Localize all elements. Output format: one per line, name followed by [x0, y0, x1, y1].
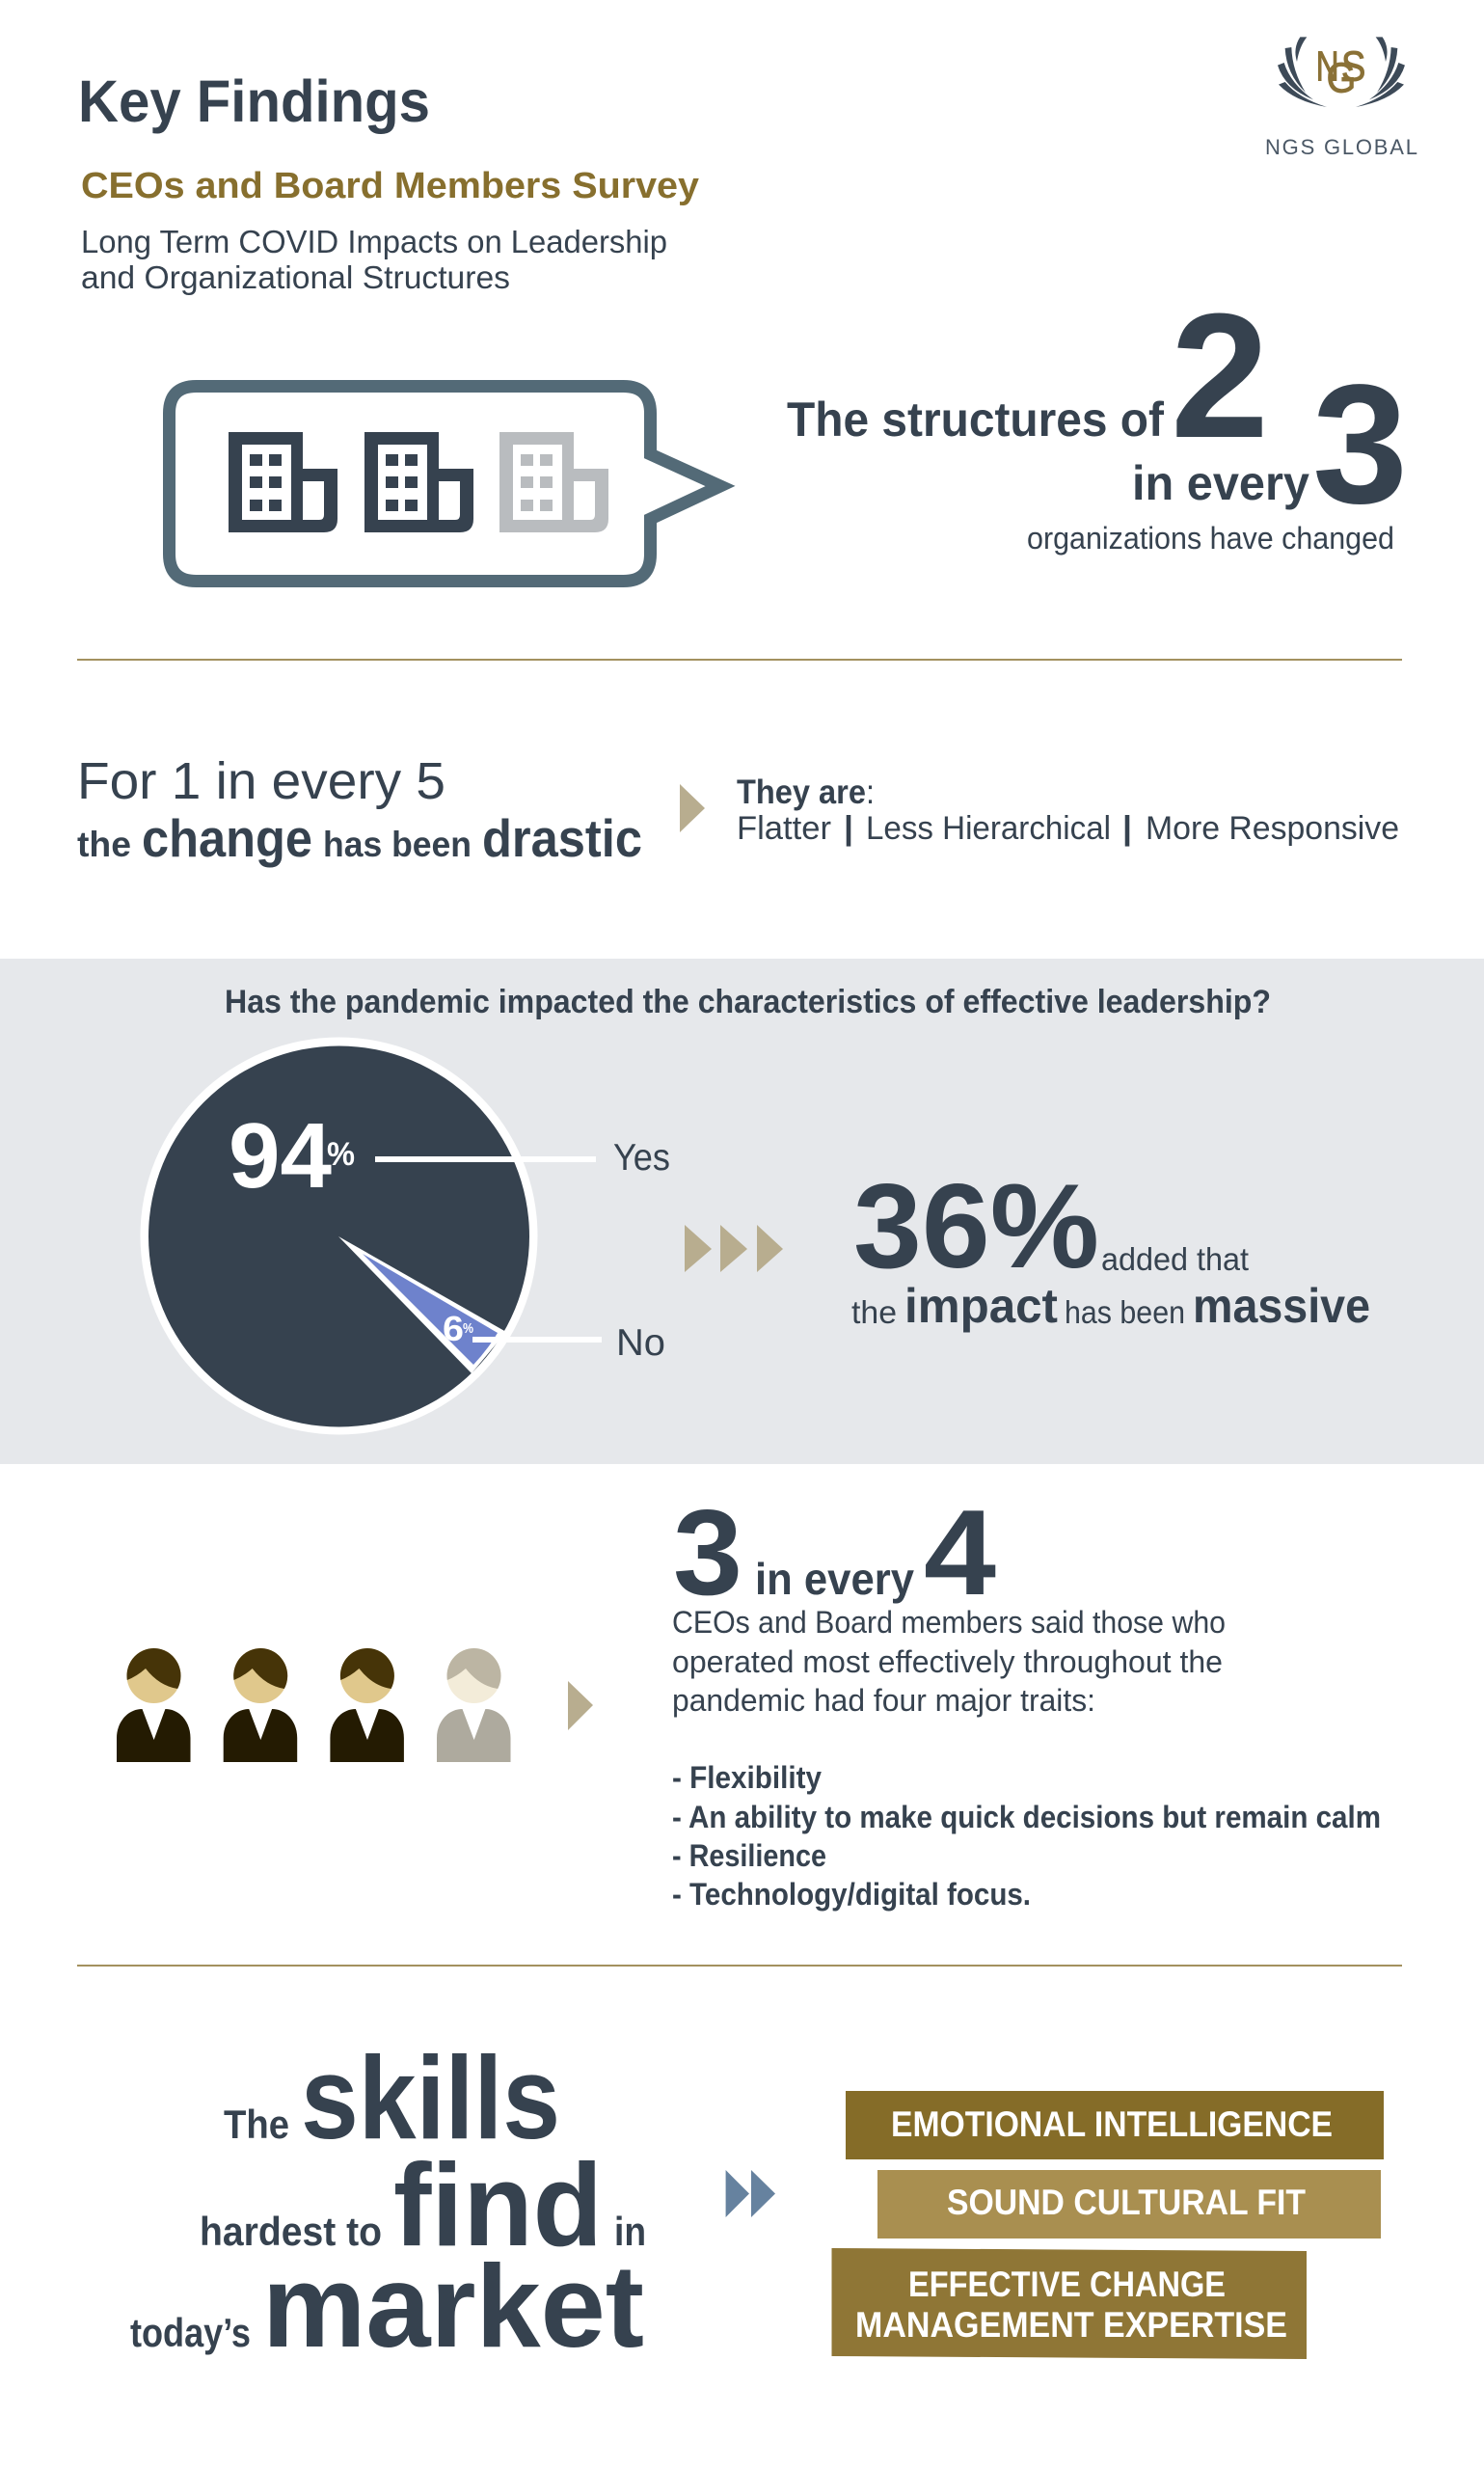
skill box: sound cultural fit	[877, 2170, 1381, 2238]
subtitle: description: Long Term COVID Impacts on Leadership	[81, 224, 667, 259]
arrow	[568, 1681, 593, 1730]
text: traits intro: operated most effectively throughout the	[672, 1644, 1223, 1679]
pie chart: %	[327, 1136, 355, 1173]
title: Key Findings	[78, 68, 430, 134]
statistic: 2 in every 3	[787, 276, 1408, 556]
statistic: 2 in every 3: 2	[1171, 276, 1269, 475]
panel heading: Has the pandemic impacted the characteristics of effective leadership?	[225, 984, 1271, 1020]
label: no: No	[616, 1322, 665, 1364]
icon: speech bubble with buildings	[170, 386, 720, 581]
icon: laurel and monogram: S	[1341, 42, 1365, 90]
statistic: 2 in every 3: The structures of	[787, 393, 1164, 447]
statistic: 1 in every 5: change	[142, 808, 312, 868]
text: they are: |	[844, 810, 853, 847]
icon: laurel and monogram: G	[1327, 54, 1356, 101]
skill box: effective change management expertise: EFFECTIVE CHANGE	[908, 2265, 1226, 2304]
statement: the skills hardest to find: today’s	[130, 2310, 251, 2355]
statement: the skills hardest to find: market	[262, 2240, 644, 2372]
arrows: triple	[685, 1225, 783, 1272]
icon: laurel and monogram: N	[1316, 42, 1339, 90]
text: they are: |	[1122, 810, 1132, 847]
statistic: 36% massive impact: massive	[1193, 1279, 1370, 1333]
statement: the skills hardest to find: skills	[301, 2032, 560, 2163]
statistic: 3 in every 4: in every	[755, 1554, 914, 1604]
text: they are: They are:	[737, 773, 875, 811]
skill box: effective change management expertise	[831, 2248, 1307, 2359]
text: they are	[737, 773, 1399, 847]
text: traits intro: CEOs and Board members said those who	[672, 1605, 1226, 1640]
statistic: 36% massive impact: impact	[904, 1279, 1058, 1333]
statement: the skills hardest to find	[130, 2032, 646, 2372]
icon: person 2	[224, 1648, 297, 1762]
list: four major traits: - An ability to make quick decisions but remain calm	[672, 1800, 1381, 1834]
logo wordmark: NGS GLOBAL	[1265, 135, 1417, 159]
statement: the skills hardest to find: find	[393, 2139, 603, 2270]
statistic: 3 in every 4: 4	[924, 1484, 996, 1620]
skill box: emotional intelligence: EMOTIONAL INTELLIGENCE	[891, 2104, 1333, 2144]
icon: person 3	[330, 1648, 404, 1762]
statistic: 1 in every 5: has been	[323, 825, 472, 864]
pie chart: 6	[443, 1309, 464, 1348]
panel: leadership impact	[0, 959, 1484, 1464]
statistic: 1 in every 5: drastic	[482, 808, 642, 868]
statistic: 2 in every 3: in every	[1132, 456, 1309, 510]
statistic: 1 in every 5: the	[77, 825, 131, 864]
icon: building grey	[499, 432, 608, 532]
pie chart: 94	[229, 1104, 332, 1207]
skill box: emotional intelligence	[846, 2091, 1384, 2159]
subtitle: survey name: CEOs and Board Members Survey	[81, 166, 699, 206]
text: they are: Less Hierarchical	[866, 810, 1111, 847]
statement: the skills hardest to find: hardest to	[200, 2209, 382, 2254]
statistic: 36% massive impact: added that	[1101, 1241, 1249, 1277]
icon: building dark 1	[229, 432, 337, 532]
statistic: 36% massive impact: 36%	[853, 1160, 1099, 1293]
subtitle: description	[81, 224, 667, 295]
text: they are: Flatter	[737, 810, 831, 847]
skill box: sound cultural fit: SOUND CULTURAL FIT	[947, 2183, 1306, 2222]
statement: the skills hardest to find: The	[224, 2102, 289, 2147]
icon: person 1	[117, 1648, 191, 1762]
icon: person 4 grey	[437, 1648, 511, 1762]
logo: NGS Global	[1265, 37, 1417, 159]
text: they are: More Responsive	[1146, 810, 1399, 847]
skill box: effective change management expertise: MANAGEMENT EXPERTISE	[855, 2305, 1287, 2345]
list: four major traits	[672, 1760, 1381, 1912]
statistic: 1 in every 5	[77, 752, 642, 868]
statistic: 3 in every 4: 3	[673, 1484, 742, 1620]
subtitle: description: and Organizational Structures	[81, 259, 510, 295]
list: four major traits: - Resilience	[672, 1838, 826, 1873]
icon: people row, 3 of 4	[117, 1648, 511, 1762]
statistic: 36% massive impact	[851, 1160, 1370, 1333]
pie chart: %	[463, 1320, 473, 1337]
statistic: 36% massive impact: the	[851, 1294, 897, 1330]
label: yes: Yes	[613, 1137, 670, 1179]
text: traits intro: pandemic had four major traits:	[672, 1683, 1095, 1718]
pie chart	[141, 1038, 602, 1435]
icon: laurel and monogram	[1278, 37, 1405, 107]
list: four major traits: - Flexibility	[672, 1760, 822, 1795]
arrows: double	[726, 2170, 775, 2217]
statistic: 2 in every 3: 3	[1312, 350, 1408, 539]
statistic: 2 in every 3: organizations have changed	[1027, 521, 1394, 556]
statistic: 36% massive impact: has been	[1065, 1294, 1185, 1330]
statistic: 1 in every 5: For 1 in every 5	[77, 752, 445, 810]
text: traits intro	[672, 1605, 1226, 1718]
statistic: 3 in every 4	[673, 1484, 996, 1620]
statement: the skills hardest to find: in	[614, 2209, 646, 2254]
list: four major traits: - Technology/digital focus.	[672, 1877, 1031, 1912]
arrow	[680, 784, 705, 832]
icon: building dark 2	[364, 432, 473, 532]
